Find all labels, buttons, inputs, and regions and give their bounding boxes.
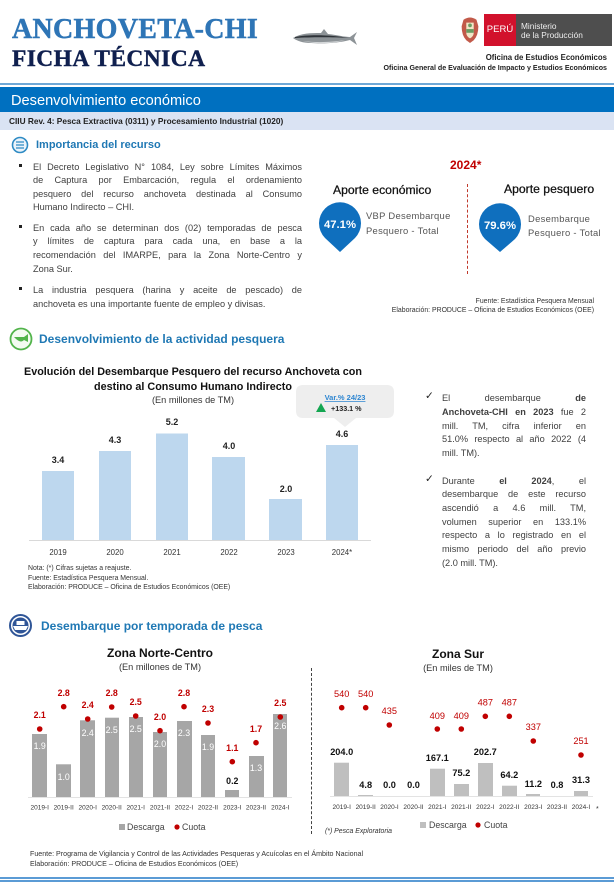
chart: Zona Norte-Centro: 2020-II (102, 804, 122, 812)
chart: Zona Norte-Centro: 2.3 (202, 704, 214, 714)
chart: Zona Sur: 2021-I (428, 804, 447, 811)
office department: Oficina General de Evaluación de Impacto y Estudios Económicos (383, 64, 607, 72)
chart: Zona Sur: 2022-I (476, 804, 495, 811)
chart: Zona Sur: 409 (430, 711, 445, 721)
chart: Zona Norte-Centro: 2019-II (54, 804, 74, 812)
bullet 3 (19, 287, 22, 290)
text block: analysis: (2.0 mill. TM). (442, 558, 498, 568)
chart: Zona Norte-Centro: 0.2 (226, 776, 239, 786)
source note bottom (30, 850, 363, 868)
text block: analysis: mill. TM, cifra inferior en (442, 421, 586, 431)
chart unit: (En millones de TM) (152, 394, 234, 404)
label: Desembarque Pesquero Total (528, 213, 601, 238)
chart: Zona Norte-Centro: 2.4 (82, 700, 94, 710)
chart: Zona Norte-Centro: 2022-II (198, 804, 218, 812)
chart: Zona Norte-Centro: 2.5 (130, 724, 142, 734)
chart: Zona Norte-Centro: 2.5 (274, 698, 287, 708)
chart: Zona Sur: 435 (382, 706, 397, 716)
logo: Perú Ministerio de la Producción (462, 14, 612, 46)
chart: Zona Norte-Centro: 1.0 (58, 772, 70, 782)
chart: Zona Norte-Centro: 1.7 (250, 724, 262, 734)
footer rule (0, 877, 614, 878)
chart: Zona Sur: 2019-II (356, 804, 376, 811)
divider (467, 184, 468, 274)
heading: Desembarque por temporada de pesca: Desembarque por temporada de pesca (41, 619, 262, 633)
chart notes: Nota: (*) Cifras sujetas a reajuste. (28, 565, 131, 572)
section band: Desenvolvimiento económico: Desenvolvimiento económico (11, 93, 201, 109)
chart notes: Elaboración: PRODUCE – Oficina de Estudios Económicos (OEE) (28, 584, 230, 591)
source note: Elaboración: PRODUCE – Oficina de Estudios Económicos (OEE) (392, 307, 594, 314)
chart: Zona Norte-Centro: 2021-II (150, 804, 170, 812)
pin: 47.1% (319, 202, 361, 252)
chart: Zona Sur: 11.2 (525, 779, 542, 789)
text block: analysis: respecto a lo registrado en el (442, 530, 586, 540)
icon: coat of arms (462, 18, 478, 43)
chart: Zona Norte-Centro: 2.3 (178, 728, 190, 738)
chart: Zona Sur: 540 (334, 689, 349, 699)
check 1: ✓ (425, 390, 434, 402)
chart: Zona Norte-Centro: 2023-I (223, 804, 242, 812)
bar chart: annual landings: 3.4 (52, 455, 64, 465)
chart: Zona Sur: 487 (478, 698, 493, 708)
chart: Zona Norte-Centro: 2.0 (154, 712, 166, 722)
text block: analysis (425, 390, 586, 568)
chart: Zona Norte-Centro: 2.8 (106, 688, 118, 698)
chart: Zona Norte-Centro: 2.8 (178, 688, 190, 698)
chart: Zona Norte-Centro: 2.4 (82, 728, 94, 738)
icon: boat (9, 614, 32, 637)
bar chart: annual landings: 2024* (332, 548, 352, 557)
grey box: Ministerio de la Producción: Ministerio (521, 21, 557, 31)
heading: 2024: 2024* (450, 158, 481, 172)
text block: importance bullets: recomendación del IMARPE, para la Zona Norte-Centro y (33, 250, 302, 260)
text block: importance bullets: En cada año se determinan dos (02) temporadas de pesca (33, 223, 302, 233)
text block: analysis: mismo periodo del año previo (442, 544, 586, 554)
chart: Zona Norte-Centro: Cuota (182, 822, 206, 832)
chart: Zona Sur: 75.2 (452, 768, 470, 778)
chart title (24, 366, 362, 393)
chart: Zona Sur: 31.3 (572, 775, 590, 785)
footer rule lower (0, 880, 614, 882)
chart: Zona Norte-Centro (28, 688, 292, 832)
check 2: ✓ (425, 473, 434, 485)
text block: analysis: ascendió a 4.6 mill. TM, (442, 503, 586, 513)
text block: analysis: El desembarque de (442, 393, 586, 403)
bar chart: annual landings: 2019 (49, 548, 67, 557)
chart title: destino al Consumo Humano Indirecto (94, 381, 292, 393)
panel: 2024 aportes (319, 158, 601, 274)
bar chart: annual landings: 5.2 (166, 417, 178, 427)
text block: importance bullets: y límites de captura para cada una, en base a la (33, 236, 302, 246)
label: Desembarque Pesquero Total: Desembarque (528, 213, 590, 224)
bullet 1 (19, 164, 22, 167)
chart: Zona Norte-Centro: 2019-I (30, 804, 49, 812)
text block: analysis: 51.0% respecto al año 2022 (4 (442, 434, 586, 444)
chart: Zona Sur: 0.8 (551, 780, 563, 790)
chart: Zona Norte-Centro: 2.5 (130, 697, 142, 707)
text block: importance bullets: Zona Sur. (33, 264, 73, 274)
pin: 79.6%: 79.6% (484, 220, 516, 232)
icon: list (12, 136, 28, 154)
chart: Zona Norte-Centro: 2.0 (154, 739, 166, 749)
bar chart: annual landings: 2022 (220, 548, 238, 557)
footnote: pesca exploratoria: (*) Pesca Exploratoria (325, 828, 392, 835)
chart: Zona Sur: 2020-I (380, 804, 399, 811)
chart: Zona Sur: 204.0 (330, 747, 353, 757)
chart: Zona Sur: 540 (358, 689, 373, 699)
heading: Aporte pesquero: Aporte pesquero (504, 182, 594, 196)
red box: Perú (484, 14, 516, 46)
pin: 79.6% (479, 203, 521, 252)
chart: Zona Sur: 337 (526, 722, 541, 732)
chart: Zona Norte-Centro: Descarga (127, 822, 165, 832)
label: VBP Desembarque Pesquero Total: Pesquero - Total (366, 224, 439, 236)
office name: Oficina de Estudios Económicos (486, 53, 607, 62)
chart: Zona Norte-Centro: 1.3 (250, 763, 262, 773)
bullet 2 (19, 225, 22, 228)
CIIU band (0, 112, 614, 130)
bar chart: annual landings: 4.0 (223, 441, 235, 451)
title: Anchoveta-CHI: ANCHOVETA-CHI (12, 14, 258, 45)
chart: Zona Norte-Centro: 2023-II (246, 804, 266, 812)
label: VBP Desembarque Pesquero Total (366, 210, 451, 236)
chart: Zona Sur: * (596, 806, 599, 813)
divider between zones (311, 668, 312, 834)
grey box: Ministerio de la Producción (516, 14, 612, 46)
chart title: Evolución del Desembarque Pesquero del recurso Anchoveta con (24, 366, 362, 378)
chart: Zona Norte-Centro: 1.9 (202, 742, 214, 752)
heading: Aporte económico: Aporte económico (333, 183, 431, 197)
bar chart: annual landings: 2023 (277, 548, 295, 557)
chart: Zona Norte-Centro: 1.9 (34, 741, 46, 751)
label: VBP Desembarque Pesquero Total: VBP Desembarque (366, 210, 451, 221)
chart: Zona Sur: 202.7 (474, 747, 497, 757)
chart: Zona Norte-Centro: 2.6 (274, 721, 287, 731)
header rule (0, 83, 614, 85)
chart: Zona Sur: Descarga (429, 820, 467, 830)
text block: analysis: desembarque de este recurso (442, 489, 586, 499)
chart: Zona Sur: 2019-I (332, 804, 351, 811)
chart: Zona Sur: 167.1 (426, 753, 449, 763)
chart: Zona Norte-Centro: 2.1 (34, 710, 46, 720)
source note: Fuente: Estadística Pesquera Mensual (476, 298, 594, 305)
chart: Zona Sur: 251 (573, 736, 589, 746)
chart: Zona Norte-Centro: 2024-I (271, 804, 290, 812)
chart: Zona Sur: 2021-II (451, 804, 472, 811)
bar chart: annual landings: 2021 (163, 548, 181, 557)
source note bottom: Fuente: Programa de Vigilancia y Control de las Actividades Pesqueras y Acuícolas en el Ámbito Nacional (30, 850, 363, 858)
text block: importance bullets: anchoveta es una importante fuente de empleo y divisas. (33, 299, 265, 309)
bar chart: annual landings: 2.0 (280, 484, 292, 494)
chart: Zona Norte-Centro: 2020-I (78, 804, 97, 812)
unit: millones: (En millones de TM) (119, 662, 201, 672)
unit: miles: (En miles de TM) (423, 662, 493, 672)
chart notes: Fuente: Estadística Pesquera Mensual. (28, 575, 148, 582)
chart: Zona Norte-Centro: 2.8 (58, 688, 70, 698)
bar chart: annual landings: 4.6 (336, 429, 348, 439)
pin: 47.1%: 47.1% (324, 219, 356, 231)
chart: Zona Norte-Centro: 2021-I (126, 804, 145, 812)
text block: analysis: Anchoveta-CHI en 2023 fue 2 (442, 407, 586, 417)
source note (392, 298, 594, 314)
bar chart: annual landings: 2020 (106, 548, 124, 557)
text block: analysis: volumen superior en 133.1% (442, 517, 586, 527)
text block: importance bullets: pesquero del recurso anchoveta destinada al Consumo (33, 189, 302, 199)
chart: Zona Sur: 64.2 (500, 770, 518, 780)
icon: anchovy fish (293, 29, 357, 45)
section band: Desenvolvimiento económico (0, 87, 614, 112)
heading: Desenvolvimiento de la actividad pesquera: Desenvolvimiento de la actividad pesquera (39, 332, 284, 346)
chart: Zona Sur: 409 (454, 711, 469, 721)
red box: Perú: PERÚ (487, 24, 513, 35)
CIIU band: CIIU Rev. 4: Pesca Extractiva (0311) y Procesamiento Industrial (1020) (9, 116, 283, 126)
grey box: Ministerio de la Producción: de la Producción (521, 30, 583, 40)
chart: Zona Norte-Centro: 2022-I (175, 804, 193, 812)
chart: Zona Sur: 0.0 (407, 780, 420, 790)
heading: Importancia del recurso: Importancia del recurso (36, 139, 161, 151)
chart: Zona Sur: 2023-I (524, 804, 543, 811)
callout: variation: +133.1 % (331, 404, 362, 413)
chart notes (28, 564, 230, 591)
text block: importance bullets: Humano Indirecto – CHI. (33, 202, 134, 212)
text block: analysis: mill. TM). (442, 448, 480, 458)
text block: importance bullets: El Decreto Legislativo N° 1084, Ley sobre Límites Máximos (33, 162, 302, 172)
icon: green fish (10, 328, 32, 350)
chart: Zona Sur: 0.0 (383, 780, 396, 790)
text block: importance bullets (19, 162, 302, 309)
label: Desembarque Pesquero Total: Pesquero - Total (528, 226, 601, 238)
chart: Zona Sur: 2020-II (403, 804, 424, 811)
chart: Zona Sur: 2023-II (547, 804, 567, 811)
callout: variation (296, 385, 394, 427)
heading: Zona Norte-Centro: Zona Norte-Centro (107, 646, 213, 660)
callout: variation: Var.% 24/23 (325, 393, 365, 402)
chart: Zona Sur: 4.8 (359, 780, 372, 790)
chart: Zona Norte-Centro: 1.1 (226, 743, 239, 753)
text block: analysis: Durante el 2024, el (442, 476, 586, 486)
subtitle: Ficha técnica: FICHA TÉCNICA (12, 46, 205, 72)
text block: importance bullets: de Captura por Embarcación, regula el ordenamiento (33, 175, 302, 185)
heading: Zona Sur: Zona Sur (432, 647, 484, 661)
chart: Zona Sur: 487 (502, 698, 517, 708)
chart: Zona Sur: 2022-II (499, 804, 520, 811)
bar chart: annual landings: 4.3 (109, 435, 121, 445)
source note bottom: Elaboración: PRODUCE – Oficina de Estudios Económicos (OEE) (30, 860, 238, 868)
chart: Zona Norte-Centro: 2.5 (106, 725, 118, 735)
text block: importance bullets: La industria pesquera (harina y aceite de pescado) de (33, 285, 302, 295)
chart: Zona Sur: Cuota (484, 820, 508, 830)
chart: Zona Sur: 2024-I (572, 804, 590, 811)
